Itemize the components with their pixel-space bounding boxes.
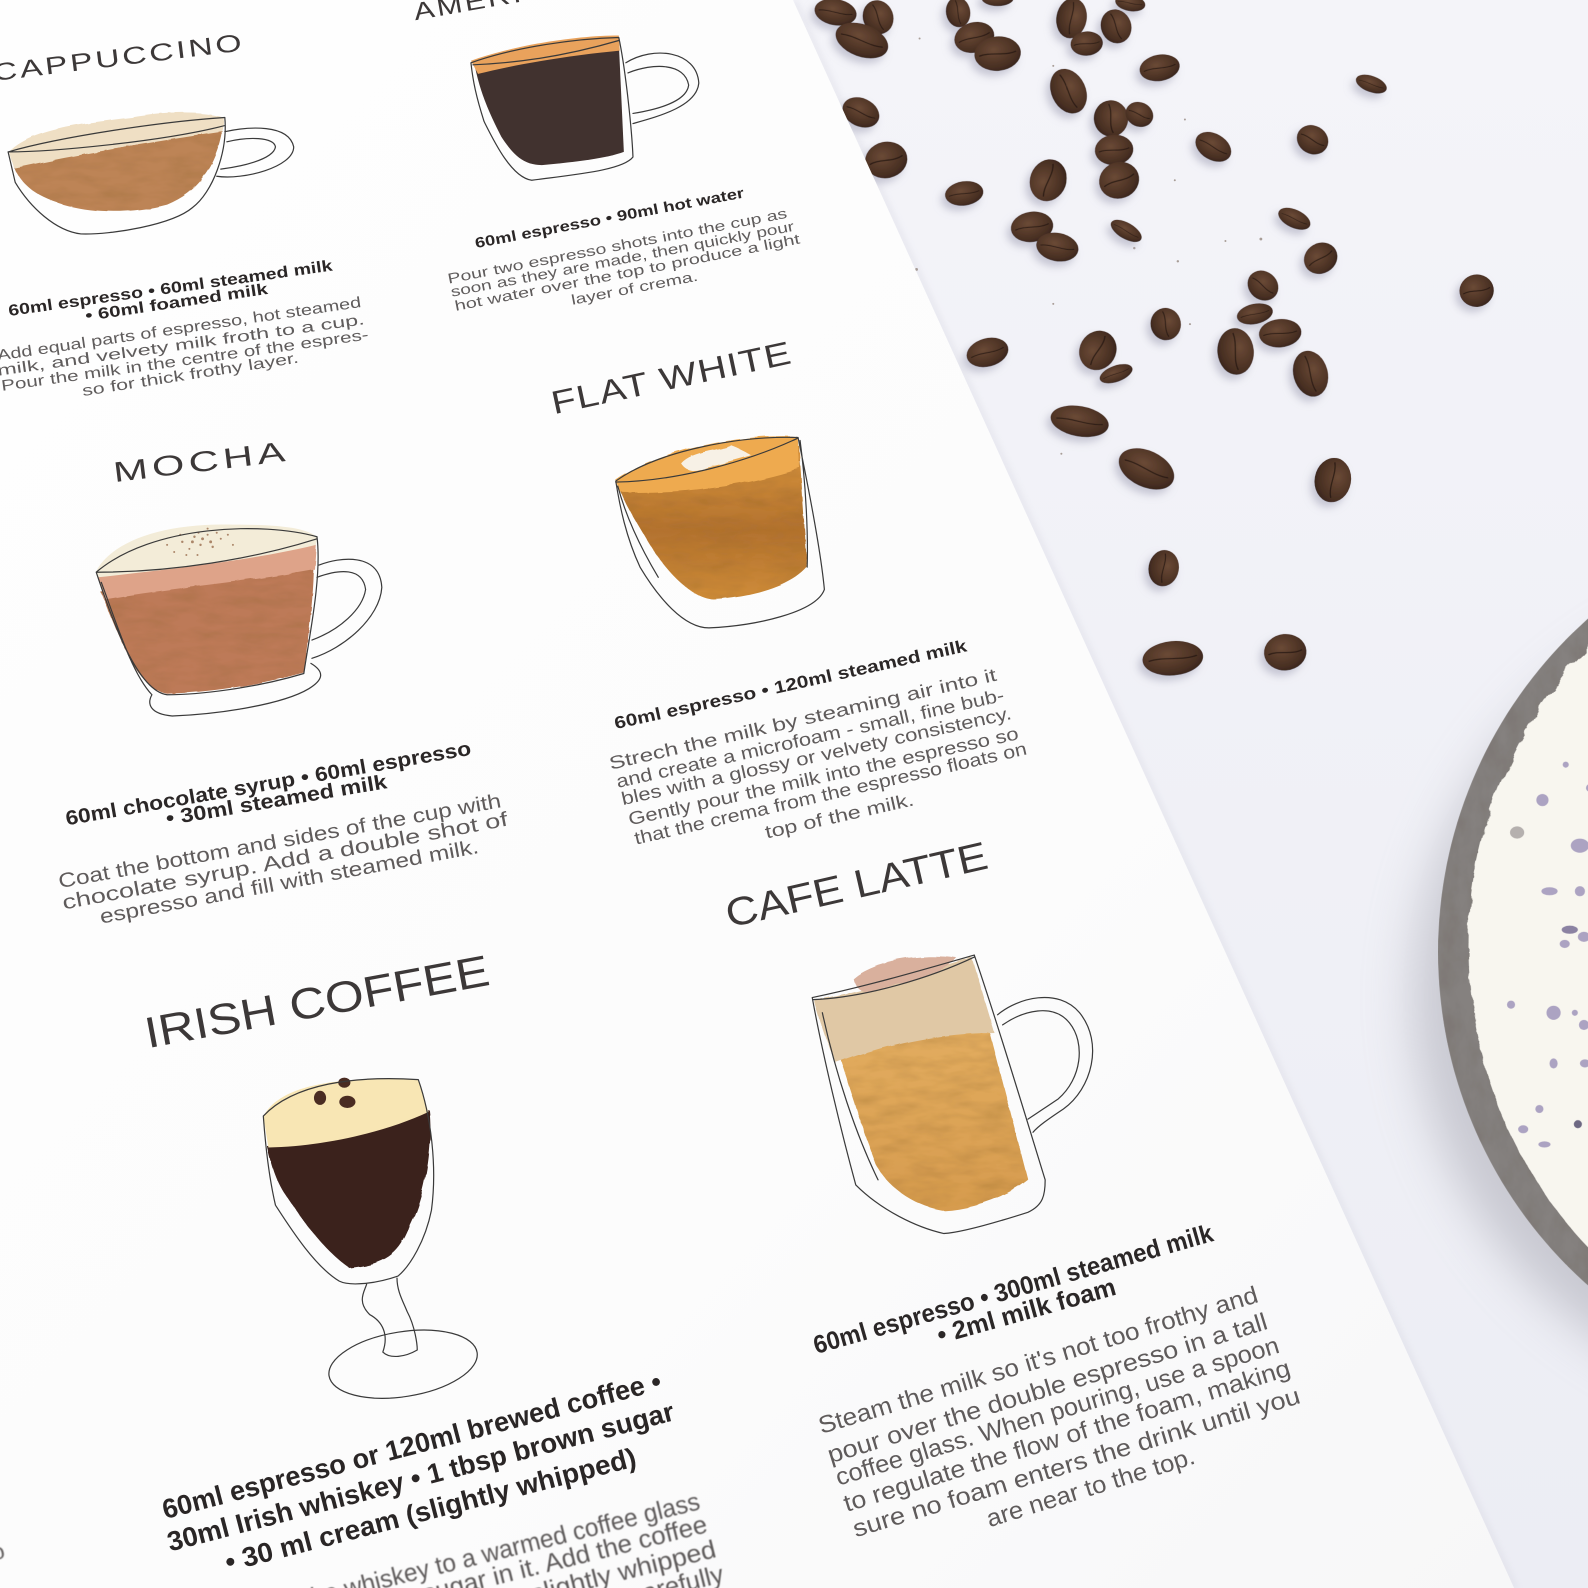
irish coffee ingredients: • 30 ml cream (slightly whipped) [222,1442,639,1578]
cappuccino ingredients: • 60ml foamed milk [84,281,269,325]
cappuccino foam [9,113,224,168]
cappuccino method: so for thick frothy layer. [81,350,300,400]
flat white method: Strech the milk by steaming air into it [607,665,998,774]
americano method: soon as they are made, then quickly pour [449,219,796,301]
flat white method: and create a microfoam - small, fine bub- [614,685,1006,792]
cafe latte method: coffee glass. When pouring, use a spoon [832,1332,1282,1491]
panel: flat white [548,334,1029,849]
latte cocoa top [853,956,957,992]
plate rim [1438,506,1588,1398]
mocha coffee [101,562,314,694]
table dust specks [915,37,1262,455]
mocha method: chocolate syrup. Add a double shot of [61,809,510,914]
americano cup outline [471,37,699,180]
cappuccino ingredients: 60ml espresso • 60ml steamed milk [7,258,334,320]
flat white crema [616,436,800,492]
americano method [446,206,801,315]
irish coffee ingredients: 60ml espresso or 120ml brewed coffee • [159,1365,664,1525]
cafe latte method: pour over the double espresso in a tall [824,1308,1271,1469]
cafe latte method: sure no foam enters the drink until you [850,1383,1303,1543]
cappuccino method: milk, and velvety milk froth to a cup. [0,311,366,380]
mocha cocoa dusting [166,528,234,556]
mocha foam [96,524,317,577]
americano method: Pour two espresso shots into the cup as [446,206,788,287]
cafe latte method: are near to the top. [983,1443,1198,1533]
cafe latte method: Steam the milk so it's not too frothy and [815,1282,1261,1440]
mocha method [57,790,510,929]
plate shadow [1413,572,1588,1423]
flat white cup illustration [616,436,824,628]
paper shadow [791,1,1519,1588]
americano method: hot water over the top to produce a light [453,231,801,315]
irish coffee cream [263,1079,428,1147]
mocha method: espresso and fill with steamed milk. [98,836,480,929]
irish coffee glass outline [263,1079,434,1356]
panel: cafe latte [721,834,1303,1543]
mocha ingredients: • 30ml steamed milk [164,771,389,830]
flat white method: Gently pour the milk into the espresso so [626,723,1020,829]
irish coffee bean garnish [314,1078,355,1108]
cafe latte ingredients: 60ml espresso • 300ml steamed milk [810,1219,1217,1360]
americano cup illustration [471,35,699,180]
cappuccino method [0,294,370,400]
cappuccino cup illustration [8,113,294,234]
plate speckles [1507,762,1588,1147]
latte glass outline [812,955,1093,1234]
flat white cup outline [616,437,824,628]
irish coffee title: IRISH COFFEE [141,947,493,1058]
plate inner glaze [1468,509,1588,1384]
panel: americano [412,0,801,315]
americano coffee [475,43,624,165]
cappuccino method: Add equal parts of espresso, hot steamed [0,294,362,364]
cappuccino method: Pour the milk in the centre of the espres- [0,326,370,395]
mocha cup outline [96,529,382,716]
cafe latte ingredients: • 2ml milk foam [934,1273,1119,1350]
flat white method: bles with a glossy or velvety consistency. [619,703,1013,809]
irish coffee glass base [324,1320,482,1408]
flat white method [607,665,1029,849]
panel: mocha [57,436,510,929]
latte foam layer [814,958,995,1063]
cafe latte method: to regulate the flow of the foam, making [840,1355,1294,1518]
irish coffee liquid [267,1110,430,1268]
irish coffee glass illustration [263,1078,482,1408]
cappuccino cup outline [8,117,294,234]
americano method: layer of crema. [570,269,699,309]
panel: irish coffee [141,947,727,1588]
irish coffee ingredients: 30ml Irish whiskey • 1 tbsp brown sugar [164,1396,678,1557]
plate: speckled ceramic dish [1438,506,1588,1398]
cafe latte method [815,1282,1303,1543]
coffee beans scattered on the table [812,0,1496,678]
flat white ingredients: 60ml espresso • 120ml steamed milk [612,635,969,733]
americano ingredients: 60ml espresso • 90ml hot water [474,185,746,252]
mocha ingredients: 60ml chocolate syrup • 60ml espresso [64,738,473,830]
americano crema [471,35,620,74]
latte milk layer [839,1023,1028,1210]
panel: cappuccino [0,29,370,400]
cafe latte title: CAFE LATTE [721,834,992,936]
mocha title: MOCHA [111,436,291,489]
flat white coffee [618,446,807,600]
mocha cup illustration [96,524,382,716]
flat white method: that the crema from the espresso floats on [632,739,1029,849]
flat white method: top of the milk. [763,790,916,842]
cappuccino ingredients [7,258,334,325]
flat white title: FLAT WHITE [548,334,795,421]
cafe latte glass illustration [812,955,1093,1234]
mocha pink band [98,542,316,600]
cappuccino coffee [14,130,223,211]
flat white latte art [682,446,751,471]
mocha method: Coat the bottom and sides of the cup with [57,790,503,893]
